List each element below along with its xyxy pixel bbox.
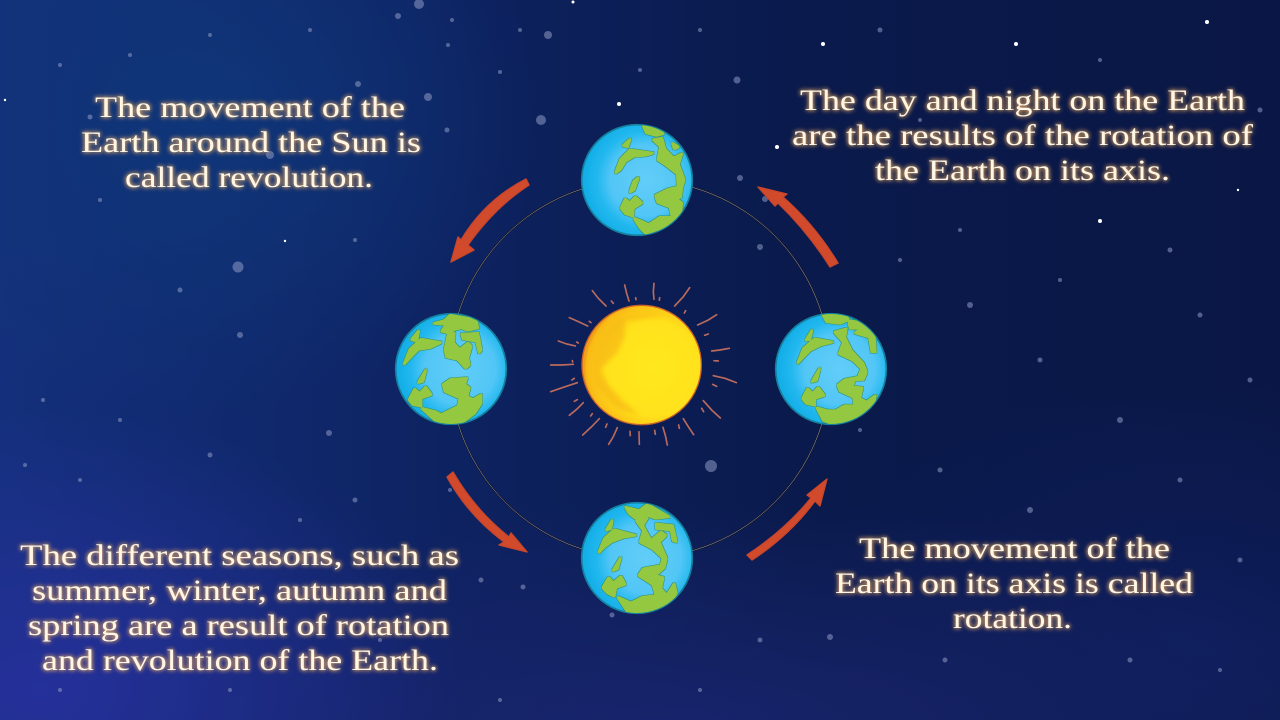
text: rotation definition <box>835 532 1193 635</box>
text: revolution definition: called revolution. <box>125 161 373 194</box>
orbit ring <box>450 180 830 558</box>
sun with rays <box>551 283 736 445</box>
sun disc <box>582 305 701 425</box>
text: seasons: and revolution of the Earth. <box>42 644 438 677</box>
arrow: top left <box>451 179 529 262</box>
sun rays <box>551 283 736 445</box>
earth: right <box>776 314 886 425</box>
earth: bottom <box>582 503 692 614</box>
text: rotation definition: The movement of the <box>859 532 1170 565</box>
text: revolution definition: The movement of the <box>95 91 405 124</box>
text: seasons: The different seasons, such as <box>20 539 459 572</box>
text: seasons <box>20 539 459 677</box>
text: revolution definition <box>81 91 421 194</box>
sun shaded left side <box>590 313 667 415</box>
text: seasons: spring are a result of rotation <box>28 609 449 642</box>
earth: left <box>396 314 506 424</box>
text: revolution definition: Earth around the Sun is <box>81 126 421 159</box>
text: seasons: summer, winter, autumn and <box>32 574 447 607</box>
text: day and night <box>792 84 1253 187</box>
arrow: top right <box>758 187 838 267</box>
arrow: bottom right <box>747 479 827 560</box>
text: day and night: The day and night on the Earth <box>800 84 1245 117</box>
arrow: bottom left <box>447 472 527 552</box>
text: day and night: are the results of the rotation of <box>792 119 1253 152</box>
text: rotation definition: Earth on its axis is called <box>835 567 1193 600</box>
earth: top <box>582 125 692 235</box>
text: rotation definition: rotation. <box>953 602 1072 635</box>
text: day and night: the Earth on its axis. <box>875 154 1170 187</box>
